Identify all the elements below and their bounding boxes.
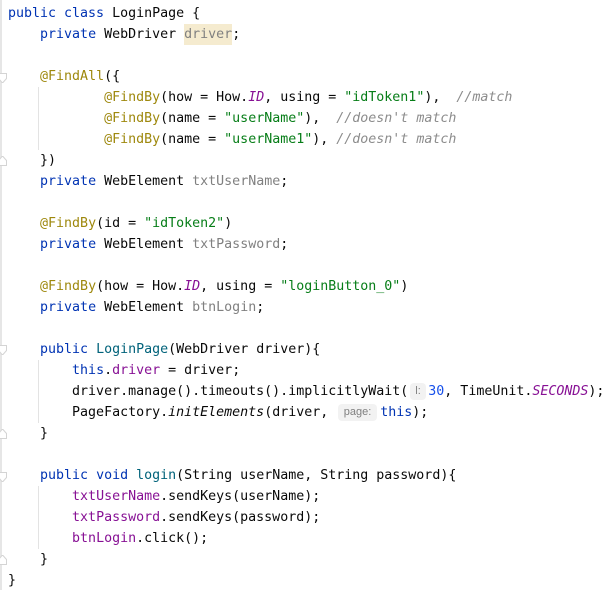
driver field: private WebDriver ; <box>40 27 240 42</box>
FindAll close: }) <box>40 153 56 168</box>
implicit wait line: driver.manage().timeouts().implicitlyWait( 30, TimeUnit.SECONDS); <box>72 384 604 399</box>
FindAll annotation: @FindAll({ <box>40 69 120 84</box>
FindBy userName: @FindBy(name = "userName"), //doesn't match <box>104 111 456 126</box>
indent guides <box>38 87 39 549</box>
sendKeys username: txtUserName.sendKeys(userName); <box>72 489 320 504</box>
parameter hint: page: page: <box>344 406 371 418</box>
parameter hint: l <box>410 383 426 400</box>
constructor close: } <box>40 426 48 441</box>
FindBy loginButton_0: @FindBy(how = How.ID, using = "loginButton_0") <box>40 279 408 294</box>
constructor signature: public LoginPage(WebDriver driver){ <box>40 342 320 357</box>
this.driver assignment: this.driver = driver; <box>72 363 240 378</box>
txtPassword field: private WebElement txtPassword; <box>40 237 288 252</box>
parameter hint: page <box>338 404 377 421</box>
sendKeys password: txtPassword.sendKeys(password); <box>72 510 320 525</box>
fold gutter <box>0 0 7 590</box>
FindBy idToken1: @FindBy(how = How.ID, using = "idToken1"), //match <box>104 90 512 105</box>
parameter hint: l: l: <box>415 385 421 397</box>
driver field: driver <box>184 27 232 42</box>
FindBy userName1: @FindBy(name = "userName1"), //doesn't match <box>104 132 456 147</box>
click login: btnLogin.click(); <box>72 531 208 546</box>
btnLogin field: private WebElement btnLogin; <box>40 300 264 315</box>
method close: } <box>40 552 48 567</box>
FindBy idToken2: @FindBy(id = "idToken2") <box>40 216 232 231</box>
login method signature: public void login(String userName, String password){ <box>40 468 456 483</box>
txtUserName field: private WebElement txtUserName; <box>40 174 288 189</box>
class declaration: public class LoginPage { <box>8 6 200 21</box>
class close: } <box>8 573 16 588</box>
initElements line: PageFactory.initElements(driver, this); <box>72 405 428 420</box>
